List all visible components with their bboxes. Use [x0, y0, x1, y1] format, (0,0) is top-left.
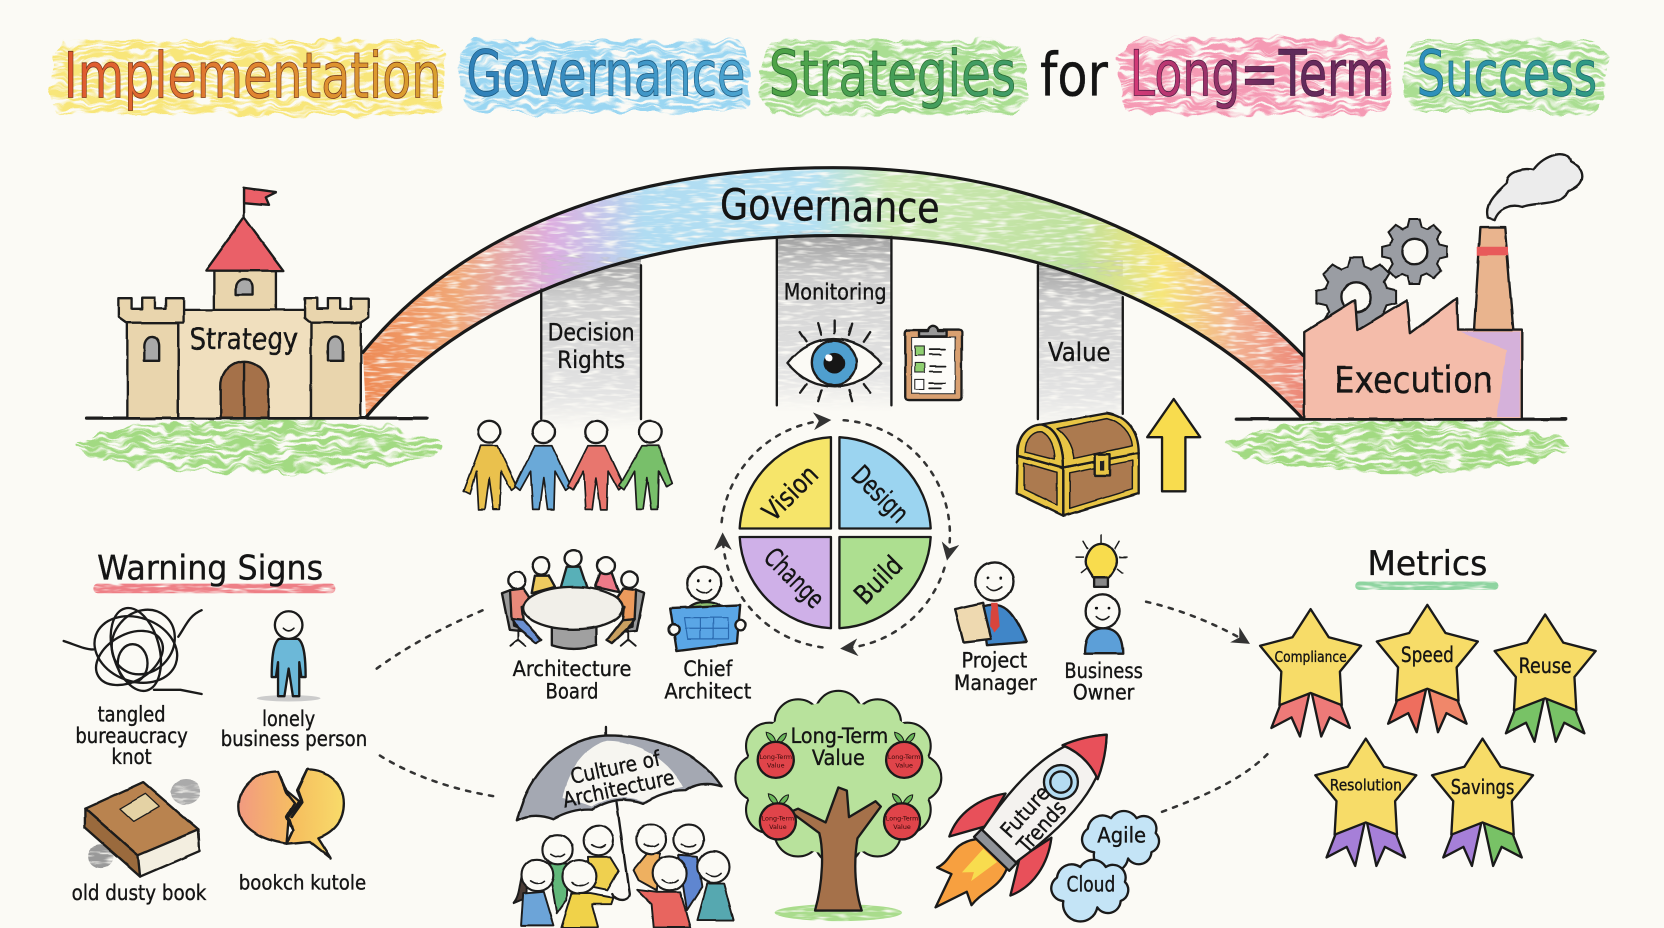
castle label: Strategy	[190, 322, 298, 357]
apple 3	[760, 794, 796, 839]
ground line	[1236, 418, 1565, 421]
quadrant: vision	[740, 437, 831, 528]
icon: chief architect	[669, 567, 746, 651]
connector: warning to culture	[380, 756, 499, 797]
label: project manager: Project	[961, 649, 1027, 674]
cloud: agile	[1082, 811, 1159, 873]
icon: business owner with light bulb	[1076, 535, 1127, 654]
label: chief architect	[664, 657, 751, 704]
apple 3: Value	[769, 824, 787, 831]
gear small	[1382, 219, 1447, 284]
governance arch	[363, 168, 1303, 419]
label: lonely business person: lonely	[262, 707, 315, 732]
label: chief architect: Chief	[683, 657, 733, 682]
badge: compliance: Compliance	[1275, 648, 1347, 666]
smoke	[1487, 154, 1582, 220]
icon: clipboard	[905, 326, 961, 400]
title highlight: pink	[1121, 38, 1390, 115]
trunk	[791, 787, 881, 911]
apple 4: Long-Term	[886, 815, 918, 822]
title highlight: blue	[463, 40, 749, 112]
label: garbled caption: bookch kutole	[239, 870, 366, 894]
apple 4	[884, 794, 920, 839]
badge: resolution: Resolution	[1330, 776, 1402, 795]
grass right	[1229, 419, 1568, 472]
title word: Governance: Governance	[466, 38, 746, 112]
gear large	[1316, 257, 1396, 337]
label: lonely business person	[221, 707, 367, 752]
apple 2: Long-Term	[888, 754, 920, 761]
icon: up arrow	[1147, 399, 1200, 491]
label: tangled bureaucracy knot: tangled	[98, 703, 166, 728]
factory: execution	[1236, 154, 1582, 419]
apple 2	[886, 732, 922, 778]
chairs	[502, 590, 531, 632]
label: build: Build	[848, 550, 909, 611]
tree label: Long-Term	[791, 724, 888, 749]
icon: people holding hands	[464, 421, 672, 509]
grass left	[75, 419, 440, 472]
cloud: cloud: Cloud	[1067, 872, 1115, 897]
quadrant: build	[839, 537, 931, 628]
label: project manager	[954, 649, 1037, 696]
icon: rocket	[903, 701, 1141, 928]
title word: Implementation: Implementation	[64, 40, 441, 114]
pillar label: Value	[1048, 338, 1111, 368]
connector: rocket to metrics	[1162, 753, 1268, 812]
badge: speed	[1377, 605, 1478, 732]
title highlight: green	[762, 40, 1023, 115]
cloud: cloud	[1051, 860, 1128, 921]
quadrant: change	[740, 537, 831, 628]
icon: long-term value tree	[735, 691, 941, 921]
umbrella label: Architecture	[561, 765, 677, 813]
icon: eye	[787, 320, 881, 401]
label: architecture board: Architecture	[513, 657, 631, 682]
heading: metrics: Metrics	[1367, 544, 1487, 584]
label: vision: Vision	[756, 459, 825, 528]
rocket label	[995, 781, 1072, 859]
heading: warning signs: Warning Signs	[97, 548, 323, 588]
title word: Strategies: Strategies	[769, 38, 1016, 112]
cycle diagram	[722, 420, 950, 648]
pillar: monitoring	[777, 231, 891, 412]
icon: architecture board	[502, 550, 644, 649]
icon: project manager	[955, 562, 1026, 645]
label: business owner: Owner	[1073, 680, 1135, 705]
icon: tangled knot	[64, 597, 202, 697]
quadrant: design	[839, 437, 931, 528]
label: old dusty book: old dusty book	[72, 881, 207, 906]
badge: reuse	[1495, 614, 1596, 742]
castle: strategy	[87, 188, 427, 418]
apple 4: Value	[893, 824, 911, 831]
connector: warning to board	[377, 610, 483, 669]
pillar: value	[1038, 260, 1123, 430]
label: tangled bureaucracy knot: bureaucracy	[75, 724, 188, 749]
title	[51, 38, 1607, 115]
badge: reuse: Reuse	[1519, 654, 1572, 679]
apple 1	[758, 732, 794, 778]
label: business owner	[1064, 659, 1143, 705]
rocket label: Trends	[1012, 796, 1072, 859]
rocket label: Future	[996, 781, 1056, 843]
umbrella label	[561, 746, 677, 813]
label: project manager: Manager	[954, 671, 1037, 696]
badge: speed: Speed	[1401, 643, 1454, 668]
icon: treasure chest	[1017, 413, 1139, 516]
title word: Long=Term: Long=Term	[1130, 38, 1390, 112]
cycle arrows	[722, 420, 950, 648]
pillar label: Monitoring	[784, 279, 887, 305]
label: architecture board: Board	[545, 679, 599, 704]
tree label line 2: Value	[812, 746, 865, 771]
title word: for: for	[1040, 42, 1108, 111]
arch label: Governance	[720, 181, 940, 234]
apple 1: Value	[767, 762, 785, 769]
icon: lonely business person	[257, 611, 320, 701]
title highlight: green 2	[1405, 40, 1607, 112]
apple 2: Value	[895, 762, 913, 769]
label: lonely business person: business person	[221, 727, 367, 752]
label: architecture board	[513, 657, 631, 704]
pillar label line 2: Rights	[557, 345, 625, 374]
factory label: Execution	[1334, 360, 1493, 402]
pillar label: Decision	[548, 318, 635, 347]
label: design: Design	[845, 460, 915, 529]
umbrella canopy	[517, 735, 722, 820]
cloud: agile: Agile	[1097, 824, 1146, 849]
badge: resolution	[1315, 739, 1416, 866]
title highlight: yellow	[51, 40, 444, 115]
umbrella label: Culture of	[568, 746, 663, 790]
connector: owner to metrics	[1146, 602, 1247, 642]
icon: broken speech bubble	[239, 769, 344, 859]
icon: old dusty book	[85, 779, 201, 877]
seated people	[532, 575, 555, 593]
badge: savings: Savings	[1451, 775, 1514, 799]
apple 3: Long-Term	[762, 815, 794, 822]
apple 1: Long-Term	[759, 754, 792, 761]
badge: compliance	[1260, 609, 1361, 736]
label: tangled bureaucracy knot	[75, 703, 188, 770]
people bodies	[514, 852, 734, 928]
label: change: Change	[757, 542, 830, 615]
ground line	[87, 417, 427, 420]
label: chief architect: Architect	[664, 679, 751, 704]
label: business owner: Business	[1064, 659, 1143, 684]
pillar: decision rights	[541, 255, 641, 430]
label: tangled bureaucracy knot: knot	[111, 745, 152, 770]
badge: savings	[1432, 739, 1533, 866]
icon: umbrella with people	[514, 727, 734, 928]
